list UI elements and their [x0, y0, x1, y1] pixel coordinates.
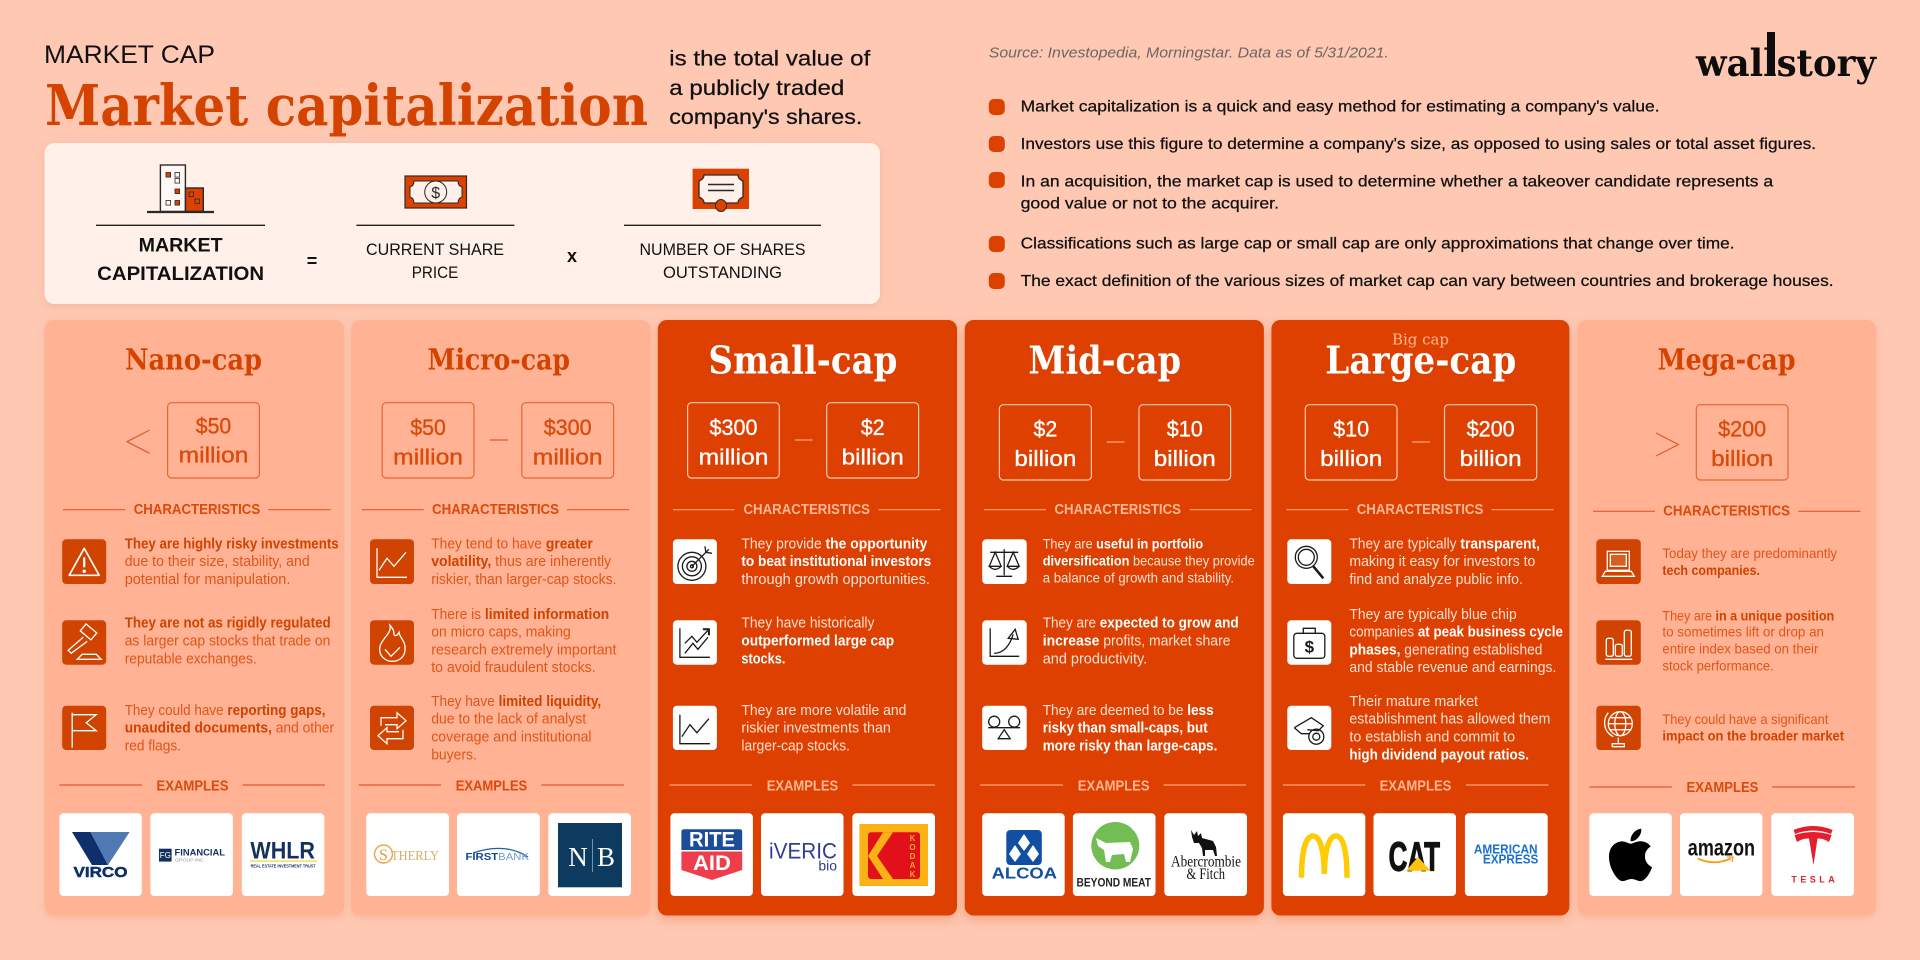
equals sign: = [307, 251, 317, 271]
logo: Kodak: A [910, 861, 916, 870]
section heading: examples: EXAMPLES [1686, 780, 1759, 796]
characteristic: not rigidly regulated [62, 616, 331, 667]
range: $50 million to $300 million: million [393, 444, 463, 469]
characteristic: expected to grow: They are expected to grow and [1043, 616, 1239, 632]
section heading: characteristics: CHARACTERISTICS [1357, 502, 1484, 518]
heading: Mega-cap: Mega-cap [1658, 342, 1796, 376]
characteristic: tech companies: Today they are predominantly [1662, 545, 1837, 561]
range: $2 billion to $10 billion: $2 [1034, 417, 1057, 442]
icon: share certificate [693, 169, 749, 212]
characteristic: outperformed large cap: outperformed large cap [741, 633, 894, 649]
bullet 4: Classifications such as large cap or small cap are only approximations that change over time. [1021, 236, 1735, 253]
range: $10 billion to $200 billion: billion [1320, 446, 1382, 471]
logo: WHLR: WHLR [250, 837, 315, 864]
logo: WHLR [242, 813, 324, 896]
heading: Micro-cap: Micro-cap [428, 342, 570, 376]
logo: Alcoa [982, 813, 1065, 896]
characteristic: highly risky: They are highly risky investments [125, 536, 339, 552]
logo: Iveric bio: iVERIC [769, 838, 837, 863]
characteristic: more volatile [673, 703, 906, 754]
characteristic: blue chip at peak: companies at peak business cycle [1349, 625, 1563, 641]
range: greater than $200 billion [1656, 405, 1788, 480]
characteristic: beat institutional investors: to beat institutional investors [741, 554, 931, 570]
logo: Sotherly: THERLY [391, 849, 439, 864]
logo: FG Financial: FINANCIAL [174, 848, 225, 859]
range: greater than $200 billion: billion [1711, 446, 1773, 471]
logo: American Express: EXPRESS [1483, 852, 1538, 866]
label: market capitalization [97, 236, 264, 285]
characteristic: more volatile: larger-cap stocks. [741, 738, 850, 754]
characteristic: greater volatility: They tend to have greater [431, 536, 593, 552]
range: $50 million to $300 million: million [533, 444, 603, 469]
characteristic: not rigidly regulated: They are not as rigidly regulated [125, 616, 331, 632]
bullet 5: The exact definition of the various sizes of market cap can vary between countries and brokerage houses. [1021, 273, 1834, 290]
characteristic: less risky than small-caps: more risky than large-caps. [1043, 738, 1217, 754]
logo: Sotherly: S [379, 847, 388, 864]
logo: Rite Aid [670, 813, 753, 896]
characteristic: unique position [1596, 607, 1834, 673]
range: $300 million to $2 billion: $2 [861, 415, 885, 440]
logo: Abercrombie & Fitch: & Fitch [1186, 866, 1225, 883]
logo: Iveric bio [761, 813, 844, 896]
label: market capitalization: CAPITALIZATION [97, 264, 264, 285]
eyebrow: MARKET CAP: MARKET CAP [44, 41, 215, 69]
logo: NB: N [568, 842, 588, 872]
label: number of shares outstanding: OUTSTANDING [663, 263, 782, 282]
range: less than $50 million: $50 [196, 413, 231, 438]
definition text [669, 47, 870, 129]
range: $50 million to $300 million: $300 [544, 415, 592, 440]
title: Market capitalization: Market capitalization [45, 73, 648, 139]
characteristic: greater volatility [370, 536, 616, 588]
range: $300 million to $2 billion: million [699, 444, 768, 469]
logo: FG Financial: FG [160, 851, 171, 860]
characteristic: beat institutional investors [673, 536, 931, 588]
panel: Micro-cap [351, 320, 650, 916]
characteristic: limited liquidity: buyers. [431, 747, 477, 763]
section heading: characteristics: CHARACTERISTICS [1054, 502, 1181, 518]
section heading: characteristics: CHARACTERISTICS [432, 502, 559, 518]
bullet 2: Investors use this figure to determine a company's size, as opposed to using sales or total asset figures. [1021, 136, 1816, 153]
characteristic: broader market impact [1596, 706, 1844, 750]
logo: American Express [1465, 813, 1548, 896]
logo: American Express: AMERICAN [1474, 843, 1538, 857]
panel: Mid-cap [965, 320, 1264, 916]
characteristic: limited information: on micro caps, making [431, 625, 571, 641]
definition text: is the total value of [669, 47, 870, 71]
bullet list [989, 99, 1834, 290]
heading: Small-cap: Small-cap [708, 337, 897, 382]
label: number of shares outstanding: NUMBER OF SHARES [640, 240, 806, 259]
characteristic: blue chip at peak: $ [1305, 637, 1315, 656]
characteristic: limited liquidity: They have limited liquidity, [431, 694, 601, 710]
characteristic: broader market impact: impact on the broader market [1662, 728, 1844, 744]
characteristic: greater volatility: volatility, thus are inherently [431, 554, 612, 570]
characteristic: unique position: to sometimes lift or drop an [1662, 624, 1824, 640]
characteristic: blue chip at peak [1287, 607, 1563, 676]
logo: Iveric bio: bio [818, 858, 837, 874]
logo: Abercrombie & Fitch [1164, 813, 1247, 896]
panel: formula [44, 143, 880, 304]
characteristic: expected to grow: and productivity. [1043, 651, 1147, 667]
characteristic: expected to grow: increase profits, market share [1043, 633, 1230, 649]
characteristic: tech companies [1596, 539, 1837, 584]
characteristic: expected to grow [982, 616, 1239, 667]
characteristic: portfolio diversification: a balance of growth and stability. [1043, 569, 1234, 585]
section heading: characteristics: CHARACTERISTICS [134, 502, 260, 518]
definition text: a publicly traded [669, 76, 844, 100]
bullet 3: In an acquisition, the market cap is used to determine whether a takeover candidate represents a [1021, 174, 1773, 191]
characteristic: limited liquidity [370, 694, 601, 763]
logo: Amazon: amazon [1688, 834, 1755, 860]
characteristic: greater volatility: riskier, than larger-cap stocks. [431, 572, 616, 588]
characteristic: limited liquidity: due to the lack of analyst [431, 712, 586, 728]
label: current share price: CURRENT SHARE [366, 240, 504, 259]
heading: Mid-cap: Mid-cap [1028, 337, 1181, 382]
characteristic: highly risky: potential for manipulation. [125, 572, 290, 588]
characteristic: not rigidly regulated: as larger cap stocks that trade on [125, 633, 330, 649]
characteristic: portfolio diversification: They are useful in portfolio [1043, 536, 1203, 552]
logo: Alcoa: ALCOA [992, 865, 1058, 882]
characteristic: tech companies: tech companies. [1662, 562, 1760, 578]
logo: Kodak: K [910, 834, 916, 843]
logo: Kodak: K [910, 870, 916, 879]
characteristic: more volatile: They are more volatile and [741, 703, 906, 719]
logo: Rite Aid: AID [693, 852, 731, 875]
logo: NB: B [597, 842, 615, 872]
bullet 3: good value or not to the acquirer. [1021, 196, 1279, 213]
logo: Virco: VIRCO [74, 864, 128, 881]
characteristic: limited liquidity: coverage and institutional [431, 730, 592, 746]
logo: Tesla: TESLA [1791, 875, 1835, 885]
characteristic: transparent: making it easy for investors to [1349, 554, 1535, 570]
panel: Large-cap [1271, 320, 1569, 916]
characteristic: unique position: They are in a unique position [1662, 607, 1834, 623]
characteristic: high dividend payout: to establish and commit to [1349, 730, 1515, 746]
characteristic: less risky than small-caps: They are deemed to be less [1043, 703, 1214, 719]
characteristic: transparent: find and analyze public info. [1349, 572, 1523, 588]
characteristic: high dividend payout [1287, 694, 1550, 763]
range: $300 million to $2 billion [688, 403, 919, 478]
logo: Amazon [1680, 813, 1762, 896]
range: $10 billion to $200 billion: billion [1460, 446, 1522, 471]
heading: Nano-cap: Nano-cap [125, 342, 262, 376]
logo: CAT [1374, 813, 1456, 896]
characteristic: limited information: research extremely important [431, 643, 616, 659]
characteristic: limited information: to avoid fraudulent stocks. [431, 660, 596, 676]
range: $50 million to $300 million: $50 [410, 415, 446, 440]
fraction line: shares outstanding [624, 224, 821, 226]
characteristic: more volatile: riskier investments than [741, 721, 891, 737]
characteristic: unique position: entire index based on their [1662, 640, 1819, 656]
logo: WHLR: REAL ESTATE INVESTMENT TRUST [251, 864, 316, 868]
characteristic: beat institutional investors: through growth opportunities. [741, 572, 930, 588]
section heading: examples: EXAMPLES [156, 778, 229, 794]
section heading: examples: EXAMPLES [1380, 778, 1452, 794]
range: $10 billion to $200 billion [1305, 405, 1537, 480]
logo: Virco [59, 813, 142, 896]
logo: Kodak: D [910, 852, 916, 861]
characteristic: portfolio diversification [982, 536, 1255, 585]
range: $10 billion to $200 billion: $200 [1467, 417, 1515, 442]
bullet 1: Market capitalization is a quick and easy method for estimating a company's value. [1021, 99, 1660, 116]
characteristic: less risky than small-caps [982, 703, 1217, 754]
definition text: company's shares. [669, 105, 862, 129]
characteristic: reporting gaps: unaudited documents, and other [125, 721, 334, 737]
range: $300 million to $2 billion: $300 [710, 415, 758, 440]
characteristic: transparent: They are typically transparent, [1349, 536, 1540, 552]
fraction line: share price [356, 224, 514, 226]
characteristic: highly risky: due to their size, stability, and [125, 554, 310, 570]
logo: FG Financial: GROUP INC. [175, 857, 205, 862]
logo: NB [548, 813, 631, 896]
icon: office building [147, 165, 214, 212]
range: $2 billion to $10 billion: billion [1154, 446, 1216, 471]
characteristic: high dividend payout: establishment has allowed them [1349, 712, 1550, 728]
characteristic: less risky than small-caps: risky than small-caps, but [1043, 721, 1208, 737]
logo: FirstBank: FIRSTBANK [466, 851, 529, 863]
characteristic: portfolio diversification: diversification because they provide [1043, 552, 1255, 568]
range: $2 billion to $10 billion: billion [1014, 446, 1076, 471]
range: less than $50 million: million [179, 443, 248, 468]
characteristic: high dividend payout: Their mature market [1349, 694, 1478, 710]
label: number of shares outstanding [640, 240, 806, 282]
range: $10 billion to $200 billion: $10 [1333, 417, 1369, 442]
characteristic: high dividend payout: high dividend payout ratios. [1349, 747, 1529, 763]
section heading: examples: EXAMPLES [1078, 778, 1150, 794]
logo: Abercrombie & Fitch: Abercrombie [1171, 854, 1241, 871]
logo: Sotherly [366, 813, 449, 896]
characteristic: blue chip at peak: They are typically blue chip [1349, 607, 1517, 623]
characteristic: limited information [370, 607, 616, 676]
characteristic: beat institutional investors: They provide the opportunity [741, 536, 927, 552]
label: market capitalization: MARKET [139, 236, 223, 257]
logo: Apple [1589, 813, 1672, 896]
panel: Mega-cap [1578, 320, 1876, 916]
multiply sign: x [567, 246, 577, 266]
bullet 3 [989, 172, 1773, 213]
characteristic: transparent [1287, 536, 1540, 588]
label: current share price [366, 240, 504, 282]
section heading: examples: EXAMPLES [767, 778, 838, 794]
characteristic: highly risky [62, 536, 339, 588]
characteristic: reporting gaps [62, 703, 334, 754]
section heading: examples: EXAMPLES [456, 778, 527, 794]
characteristic: outperformed large cap: They have historically [741, 616, 875, 632]
section heading: characteristics: CHARACTERISTICS [1663, 504, 1790, 520]
characteristic: outperformed large cap: stocks. [741, 651, 785, 667]
logo: wallstory: wallstory [1695, 41, 1877, 85]
characteristic: broader market impact: They could have a significant [1662, 711, 1828, 727]
characteristic: blue chip at peak: and stable revenue and earnings. [1349, 660, 1556, 676]
logo: Rite Aid: RITE [689, 829, 735, 852]
section heading: characteristics: CHARACTERISTICS [744, 502, 870, 518]
characteristic: blue chip at peak: phases, generating established [1349, 643, 1542, 659]
range: $50 million to $300 million [382, 403, 614, 478]
logo: Beyond Meat: BEYOND MEAT [1076, 876, 1152, 890]
panel: Small-cap [658, 320, 957, 916]
range: $300 million to $2 billion: billion [842, 444, 904, 469]
characteristic: reporting gaps: They could have reporting gaps, [125, 703, 326, 719]
source note: Source: Investopedia, Morningstar. Data as of 5/31/2021. [989, 44, 1389, 61]
logo: Kodak: O [909, 843, 916, 852]
characteristic: unique position: stock performance. [1662, 657, 1774, 673]
icon: banknote: $ [431, 185, 440, 202]
range: less than $50 million [127, 403, 259, 478]
logo: Kodak [852, 813, 935, 896]
logo: McDonald's [1283, 813, 1365, 896]
range: $2 billion to $10 billion: $10 [1167, 417, 1203, 442]
characteristic: limited information: There is limited information [431, 607, 609, 623]
sub-heading: Big cap: Big cap [1392, 330, 1449, 348]
logo: CAT: CAT [1389, 834, 1440, 880]
characteristic: reporting gaps: red flags. [125, 738, 181, 754]
logo: Tesla [1771, 813, 1854, 896]
icon: banknote [405, 176, 466, 208]
label: current share price: PRICE [412, 263, 458, 282]
characteristic: not rigidly regulated: reputable exchanges. [125, 651, 257, 667]
logo: Beyond Meat [1073, 813, 1156, 896]
logo: FG Financial [150, 813, 233, 896]
panel: Nano-cap [45, 320, 344, 916]
fraction line: market capitalization [96, 224, 265, 226]
heading: Large-cap: Large-cap [1325, 337, 1516, 382]
logo: FirstBank [457, 813, 540, 896]
range: $2 billion to $10 billion [999, 405, 1231, 480]
range: greater than $200 billion: $200 [1718, 417, 1766, 442]
characteristic: outperformed large cap [673, 616, 894, 667]
